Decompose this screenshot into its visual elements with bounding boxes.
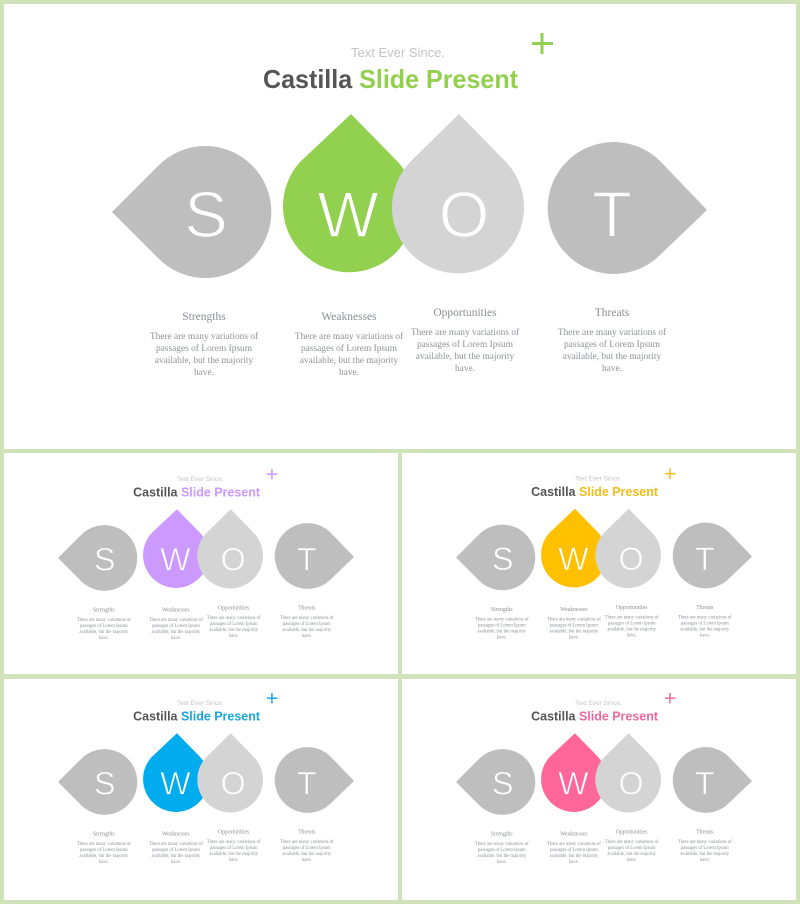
text block: opportunities: There are many variations of bbox=[207, 616, 261, 621]
text block: strengths bbox=[77, 832, 131, 865]
text block: threats bbox=[280, 606, 334, 639]
text block: threats: available, but the majority bbox=[680, 852, 730, 857]
text block: weaknesses: passages of Lorem Ipsum bbox=[550, 848, 598, 853]
text block: opportunities: passages of Lorem Ipsum bbox=[417, 339, 514, 350]
text block: weaknesses bbox=[547, 607, 601, 641]
text block: threats: Threats bbox=[298, 606, 316, 612]
text block: opportunities: available, but the majority bbox=[607, 628, 657, 633]
W drop bbox=[143, 509, 209, 588]
text block: weaknesses: There are many variations of bbox=[547, 842, 601, 847]
S drop bbox=[456, 525, 535, 590]
S drop: S bbox=[94, 541, 116, 577]
text block: weaknesses: have. bbox=[569, 860, 579, 865]
text block: strengths: available, but the majority bbox=[79, 630, 129, 635]
text block: opportunities: passages of Lorem Ipsum bbox=[608, 622, 656, 627]
text block: weaknesses: Weaknesses bbox=[162, 608, 190, 614]
text block: opportunities: available, but the majority bbox=[607, 852, 657, 857]
subtitle: Text Ever Since. bbox=[575, 700, 622, 707]
O drop: O bbox=[221, 765, 246, 801]
text block: strengths: There are many variations of bbox=[475, 618, 529, 623]
text block: threats: Threats bbox=[696, 830, 714, 836]
text block: strengths: have. bbox=[99, 636, 109, 641]
text block: strengths: available, but the majority bbox=[155, 356, 254, 366]
icon: plus bbox=[267, 469, 277, 479]
text block: opportunities: have. bbox=[627, 858, 637, 863]
text block: strengths: There are many variations of bbox=[150, 331, 259, 342]
text block: strengths: Strengths bbox=[93, 608, 115, 614]
text block: strengths: available, but the majority bbox=[477, 630, 527, 635]
T drop bbox=[275, 747, 354, 813]
T drop: T bbox=[695, 765, 715, 801]
text block: threats: have. bbox=[700, 634, 710, 639]
text block: strengths: have. bbox=[194, 368, 214, 378]
panel: blue slide bbox=[4, 679, 398, 900]
O drop bbox=[197, 509, 263, 588]
text block: strengths: have. bbox=[497, 636, 507, 641]
O drop: O bbox=[221, 541, 246, 577]
text block: threats: have. bbox=[700, 858, 710, 863]
text block: weaknesses: have. bbox=[171, 860, 181, 865]
text block: opportunities: have. bbox=[229, 858, 239, 863]
text block: opportunities: available, but the majority bbox=[416, 352, 515, 362]
text block: strengths: Strengths bbox=[491, 832, 513, 838]
subtitle: Text Ever Since. bbox=[351, 45, 445, 60]
text block: weaknesses: have. bbox=[339, 368, 359, 378]
text block: threats: There are many variations of bbox=[280, 616, 334, 621]
text block: weaknesses: available, but the majority bbox=[549, 630, 599, 635]
text block: weaknesses: passages of Lorem Ipsum bbox=[152, 624, 200, 629]
text block: weaknesses bbox=[547, 832, 601, 865]
W drop bbox=[283, 114, 415, 272]
text block: strengths: passages of Lorem Ipsum bbox=[80, 848, 128, 853]
text block: strengths bbox=[150, 311, 259, 378]
text block: threats: available, but the majority bbox=[282, 628, 332, 633]
text block: threats bbox=[678, 605, 732, 639]
text block: strengths: passages of Lorem Ipsum bbox=[478, 624, 526, 629]
text block: threats: passages of Lorem Ipsum bbox=[564, 339, 661, 350]
text block: strengths: have. bbox=[99, 860, 109, 865]
text block: opportunities: Opportunities bbox=[433, 307, 497, 319]
text block: weaknesses bbox=[295, 311, 404, 378]
text block: opportunities: have. bbox=[627, 634, 637, 639]
text block: weaknesses: There are many variations of bbox=[149, 842, 203, 847]
icon: plus bbox=[665, 468, 675, 479]
text block: strengths bbox=[475, 832, 529, 865]
W drop bbox=[541, 509, 607, 587]
text block: strengths: passages of Lorem Ipsum bbox=[478, 848, 526, 853]
icon: plus bbox=[532, 33, 553, 54]
text block: strengths: have. bbox=[497, 860, 507, 865]
text block: weaknesses: There are many variations of bbox=[295, 331, 404, 342]
T drop bbox=[548, 142, 707, 274]
text block: opportunities: Opportunities bbox=[616, 605, 648, 611]
text block: opportunities: passages of Lorem Ipsum bbox=[210, 622, 258, 627]
W drop: W bbox=[317, 178, 379, 251]
text block: weaknesses: There are many variations of bbox=[149, 618, 203, 623]
text block: opportunities bbox=[605, 605, 659, 639]
text block: threats: available, but the majority bbox=[282, 852, 332, 857]
text block: strengths: Strengths bbox=[93, 832, 115, 838]
W drop: W bbox=[558, 765, 589, 801]
text block: weaknesses: passages of Lorem Ipsum bbox=[301, 343, 398, 354]
text block: threats: There are many variations of bbox=[678, 840, 732, 845]
text block: strengths: passages of Lorem Ipsum bbox=[156, 343, 253, 354]
O drop bbox=[595, 509, 661, 588]
S drop: S bbox=[94, 765, 116, 801]
W drop: W bbox=[558, 541, 589, 577]
text block: opportunities bbox=[411, 307, 520, 374]
text block: threats: available, but the majority bbox=[563, 352, 662, 362]
text block: weaknesses: Weaknesses bbox=[560, 607, 588, 613]
S drop bbox=[112, 146, 271, 278]
text block: opportunities: have. bbox=[455, 364, 475, 374]
text block: threats: passages of Lorem Ipsum bbox=[681, 622, 729, 627]
O drop bbox=[392, 114, 524, 273]
text block: opportunities: available, but the majority bbox=[209, 628, 259, 633]
S drop bbox=[58, 525, 137, 591]
W drop: W bbox=[160, 765, 191, 801]
text block: opportunities: There are many variations of bbox=[605, 840, 659, 845]
text block: opportunities bbox=[207, 606, 261, 639]
T drop: T bbox=[592, 178, 632, 251]
title: Castilla Slide Present bbox=[263, 64, 518, 94]
panel: purple slide bbox=[4, 453, 398, 674]
text block: opportunities: Opportunities bbox=[218, 606, 250, 612]
text block: threats: have. bbox=[302, 634, 312, 639]
text block: strengths: Strengths bbox=[182, 311, 226, 323]
W drop: W bbox=[160, 541, 191, 577]
T drop: T bbox=[297, 541, 317, 577]
text block: weaknesses bbox=[149, 608, 203, 641]
text block: weaknesses bbox=[149, 832, 203, 865]
S drop bbox=[456, 749, 535, 815]
text block: strengths: available, but the majority bbox=[477, 854, 527, 859]
text block: threats: passages of Lorem Ipsum bbox=[681, 846, 729, 851]
text block: strengths: passages of Lorem Ipsum bbox=[80, 624, 128, 629]
text block: opportunities: There are many variations of bbox=[411, 327, 520, 338]
text block: weaknesses: Weaknesses bbox=[321, 311, 377, 323]
text block: weaknesses: Weaknesses bbox=[560, 832, 588, 838]
text block: opportunities bbox=[605, 830, 659, 863]
subtitle: Text Ever Since. bbox=[177, 476, 224, 483]
text block: threats bbox=[678, 830, 732, 863]
T drop: T bbox=[297, 765, 317, 801]
text block: strengths bbox=[475, 607, 529, 641]
text block: threats: passages of Lorem Ipsum bbox=[283, 622, 331, 627]
subtitle: Text Ever Since. bbox=[575, 475, 622, 482]
O drop bbox=[595, 733, 661, 812]
title: Castilla Slide Present bbox=[133, 484, 261, 499]
T drop bbox=[673, 747, 752, 813]
text block: weaknesses: passages of Lorem Ipsum bbox=[550, 624, 598, 629]
text block: weaknesses: available, but the majority bbox=[151, 854, 201, 859]
text block: opportunities: There are many variations of bbox=[207, 840, 261, 845]
text block: weaknesses: available, but the majority bbox=[151, 630, 201, 635]
S drop: S bbox=[184, 178, 228, 251]
text block: weaknesses: There are many variations of bbox=[547, 618, 601, 623]
text block: threats: Threats bbox=[595, 307, 630, 319]
text block: weaknesses: have. bbox=[569, 636, 579, 641]
text block: opportunities: Opportunities bbox=[616, 830, 648, 836]
text block: opportunities: Opportunities bbox=[218, 830, 250, 836]
text block: strengths bbox=[77, 608, 131, 641]
text block: threats: There are many variations of bbox=[558, 327, 667, 338]
text block: threats: passages of Lorem Ipsum bbox=[283, 846, 331, 851]
T drop bbox=[275, 523, 354, 589]
text block: opportunities bbox=[207, 830, 261, 863]
O drop: O bbox=[619, 541, 644, 577]
W drop bbox=[143, 733, 209, 812]
text block: strengths: available, but the majority bbox=[79, 854, 129, 859]
text block: weaknesses: available, but the majority bbox=[549, 854, 599, 859]
O drop bbox=[197, 733, 263, 812]
text block: threats bbox=[280, 830, 334, 863]
S drop: S bbox=[492, 541, 514, 577]
S drop bbox=[58, 749, 137, 815]
text block: threats bbox=[558, 307, 667, 374]
text block: threats: There are many variations of bbox=[280, 840, 334, 845]
icon: plus bbox=[665, 693, 675, 703]
text block: opportunities: There are many variations of bbox=[605, 616, 659, 621]
O drop: O bbox=[439, 178, 489, 251]
text block: weaknesses: available, but the majority bbox=[300, 356, 399, 366]
text block: threats: Threats bbox=[696, 605, 714, 611]
S drop: S bbox=[492, 765, 514, 801]
subtitle: Text Ever Since. bbox=[177, 700, 224, 707]
title: Castilla Slide Present bbox=[531, 484, 659, 499]
T drop: T bbox=[695, 541, 715, 577]
panel: pink slide bbox=[402, 679, 796, 900]
title: Castilla Slide Present bbox=[531, 708, 659, 723]
text block: opportunities: have. bbox=[229, 634, 239, 639]
text block: strengths: There are many variations of bbox=[77, 842, 131, 847]
icon: plus bbox=[267, 693, 277, 703]
text block: threats: There are many variations of bbox=[678, 616, 732, 621]
text block: strengths: There are many variations of bbox=[77, 618, 131, 623]
text block: threats: available, but the majority bbox=[680, 628, 730, 633]
T drop bbox=[673, 523, 752, 588]
text block: weaknesses: have. bbox=[171, 636, 181, 641]
text block: weaknesses: Weaknesses bbox=[162, 832, 190, 838]
text block: strengths: There are many variations of bbox=[475, 842, 529, 847]
text block: opportunities: passages of Lorem Ipsum bbox=[608, 846, 656, 851]
title: Castilla Slide Present bbox=[133, 708, 261, 723]
W drop bbox=[541, 733, 607, 812]
text block: threats: have. bbox=[602, 364, 622, 374]
panel: main green slide bbox=[4, 4, 796, 449]
text block: weaknesses: passages of Lorem Ipsum bbox=[152, 848, 200, 853]
text block: opportunities: available, but the majority bbox=[209, 852, 259, 857]
text block: threats: have. bbox=[302, 858, 312, 863]
text block: threats: Threats bbox=[298, 830, 316, 836]
O drop: O bbox=[619, 765, 644, 801]
text block: opportunities: passages of Lorem Ipsum bbox=[210, 846, 258, 851]
panel: yellow slide bbox=[402, 453, 796, 674]
text block: strengths: Strengths bbox=[491, 607, 513, 613]
